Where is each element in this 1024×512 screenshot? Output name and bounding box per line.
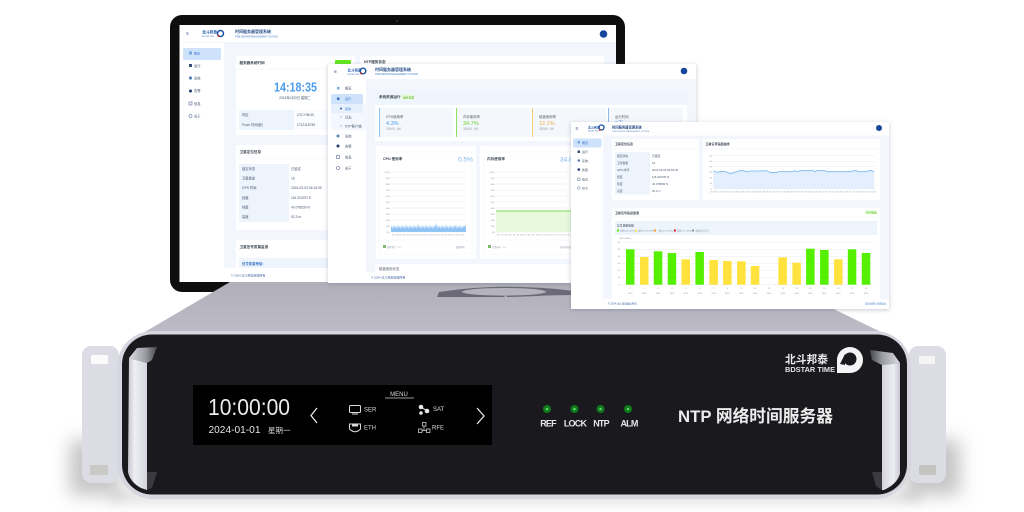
window three footer: 前往官网 — [865, 302, 876, 306]
satellite info panel: 卫星数量 — [617, 161, 628, 165]
CPU chart card: 100% — [384, 172, 390, 174]
server time card: Posix 时间(秒) — [242, 122, 263, 127]
screen one sidebar: 运行 — [194, 63, 201, 68]
quality legend: 优秀(≥40 dBHz) — [620, 228, 636, 232]
stat: uptime: 当前状态 · 良好 — [615, 126, 631, 130]
CPU chart card: 80% — [386, 184, 390, 186]
LCD display — [193, 385, 492, 445]
signal quality panel: 50 — [618, 249, 621, 251]
window three footer: 立即登录 — [876, 302, 887, 306]
window two header — [328, 64, 696, 79]
bar axis labels: 16 — [837, 288, 840, 290]
window two sidebar: 概览 — [345, 86, 352, 90]
right handle — [870, 350, 900, 490]
window three contents — [571, 122, 889, 309]
server chassis — [70, 282, 960, 503]
icon: network RFE: RFE — [432, 426, 444, 432]
screen one sidebar: 告警 — [194, 88, 201, 93]
satellite info card: 2024-03-03 06:18:35 — [291, 186, 322, 190]
bar axis labels: 4 — [671, 288, 673, 290]
memory chart card: 已用内存 : 1.0 — [492, 245, 506, 249]
window three sidebar: 系统 — [582, 158, 588, 163]
server time card: 1712118735 — [297, 123, 315, 127]
brand logo: 北斗邦泰 — [785, 352, 828, 366]
resource status card: 系统资源运行 — [379, 94, 401, 99]
bar axis labels: GPS — [725, 293, 730, 295]
window three sidebar: 告警 — [582, 167, 588, 172]
memory chart card: 10% — [491, 226, 495, 228]
bar axis labels: GPS — [711, 293, 717, 295]
chassis rim — [117, 331, 911, 499]
CPU chart card: 使用时间 — [456, 245, 465, 249]
window three header: BDSTAR TIME — [588, 130, 599, 132]
LED labels — [540, 418, 638, 428]
satellite info card: GPS 时间 — [242, 185, 256, 190]
signal quality panel — [612, 208, 880, 299]
memory chart card: 09:18:35 09:18:45 09:18:55 09:19:05 09:19:15 09:19:25 09:19:35 — [497, 234, 578, 236]
window two header: 北斗邦泰 — [348, 68, 362, 72]
satellite info card: 高度 — [242, 214, 249, 219]
bar axis labels: 5 — [685, 288, 687, 290]
memory area — [496, 211, 584, 232]
bar axis labels: 3 — [657, 288, 659, 290]
window two footer — [366, 272, 696, 283]
bar axis labels: GPS — [780, 293, 786, 295]
screen one header: TIME SERVER MANAGEMENT SYSTEM — [235, 36, 278, 38]
signal quality panel: 60 — [618, 242, 621, 244]
window two sidebar: 实时 — [345, 106, 351, 111]
memory chart card: 40% — [491, 208, 495, 210]
satellite info card: 116.324787 E — [291, 196, 312, 200]
window three sidebar: 运行 — [582, 149, 588, 154]
icon: ethernet ETH: ETH — [364, 426, 376, 432]
bar axis labels: GPS — [767, 293, 772, 295]
resource status card: 运行正常 — [403, 95, 414, 99]
signal curve — [713, 171, 874, 189]
screen one header — [180, 25, 616, 43]
window two header: ≡ — [334, 70, 337, 76]
icon: monitor SER — [350, 406, 377, 414]
screen one — [180, 25, 616, 282]
icon: monitor SER: SER — [364, 408, 377, 414]
screen three window — [571, 122, 889, 309]
screen two window — [328, 64, 696, 283]
satellite info card: 锁定状态 — [242, 166, 256, 171]
bar axis labels: GPS — [656, 293, 661, 295]
brand logo — [785, 347, 863, 374]
server time card: 时区 — [242, 112, 249, 117]
memory chart card: 30% — [491, 214, 495, 216]
date readout: 星期一 — [268, 426, 291, 435]
bar axis labels: 14 — [809, 288, 812, 290]
stat: cpu — [379, 108, 453, 137]
CPU chart card: 20% — [386, 220, 390, 222]
window three header: 北斗邦泰 — [588, 124, 600, 130]
signal quality card: 信号质量等级: — [242, 261, 263, 266]
bar axis labels: GPS — [850, 293, 855, 295]
satellite info panel: 经度 — [617, 175, 623, 179]
bar axis labels: GPS — [670, 293, 675, 295]
satellite info card: 已锁定 — [291, 166, 302, 171]
CPU chart card: 90% — [386, 178, 390, 180]
LED labels: ALM — [620, 418, 638, 428]
bar axis labels — [628, 288, 869, 295]
satellite info card: 16 — [291, 176, 295, 180]
bar axis labels: GPS — [864, 293, 869, 295]
window two contents — [328, 64, 696, 283]
window three header: 时间服务器管理系统 — [612, 124, 642, 130]
bar axis labels: GPS — [683, 293, 689, 295]
CPU chart card: 实时用户 : 1.0 — [387, 245, 401, 249]
screen one header: 北斗邦泰 — [202, 30, 217, 34]
icon: ethernet ETH — [350, 424, 376, 432]
product title: NTP 网络时间服务器 — [678, 406, 833, 426]
left rack ear — [82, 346, 119, 483]
window three footer: © 2024 北斗邦泰版权所有 — [608, 302, 637, 306]
stat: cpu: 4.3% — [386, 121, 399, 127]
signal curve panel: 40 — [710, 166, 713, 168]
memory chart card: 90% — [491, 178, 495, 180]
window two sidebar: 运行 — [345, 96, 351, 101]
screen one header: 时间服务器管理系统 — [235, 28, 271, 34]
window three footer — [603, 299, 889, 309]
satellite bars — [626, 249, 870, 285]
bar axis labels: 17 — [851, 288, 854, 290]
bar axis labels: GPS — [753, 293, 758, 295]
right rack ear — [909, 346, 946, 483]
signal quality panel: SNR (dBHz) — [619, 238, 631, 240]
screen one sidebar: 概览 — [194, 50, 200, 56]
satellite info panel: GPS 时间 — [617, 168, 629, 172]
bar axis labels: GPS — [642, 293, 647, 295]
window two sidebar: 信息 — [345, 154, 352, 160]
satellite info card: 卫星定位信息 — [240, 149, 261, 154]
bar axis labels: 9 — [741, 288, 743, 290]
satellite info card: 52.3 m — [291, 215, 301, 219]
satellite info panel — [612, 139, 699, 200]
memory chart card: 20% — [491, 220, 495, 222]
signal curve panel: 09:19:01 09:19:02 09:19:03 09:19:04 09:19:05 09:19:06 09:19:07 09:19:08 09:19:09 09:19:10 09:19:11 09:19:12 09:19:13 09:19:14 09:19:15 09:19:16 — [710, 192, 877, 194]
signal quality card — [236, 240, 604, 270]
window two header: TIME SERVER MANAGEMENT SYSTEM — [375, 73, 418, 76]
server time card — [236, 56, 355, 135]
satellite info panel: 高度 — [617, 189, 623, 193]
date readout — [208, 424, 291, 436]
server time card: 2024年4月3日 星期二 — [279, 95, 312, 100]
stat: uptime — [608, 108, 683, 137]
CPU spikes — [391, 222, 466, 232]
CPU chart card: 70% — [386, 190, 390, 192]
signal curve panel: 卫星信号强度曲线 — [706, 141, 730, 146]
screen one header: ≡ — [186, 31, 189, 37]
satellite info card: 40.078530 N — [291, 206, 311, 210]
bar axis labels: 13 — [795, 288, 799, 290]
signal quality panel: 10 — [618, 277, 621, 279]
server time card: UTC+08:00 — [297, 113, 314, 117]
memory chart card: 70% — [491, 190, 495, 192]
satellite info card: 经度 — [242, 195, 249, 200]
stat: disk: 12.1% — [539, 121, 555, 127]
CPU chart card — [376, 146, 476, 259]
lid emblem — [437, 287, 572, 297]
memory chart card: 0% — [492, 232, 495, 234]
bar axis labels: 11 — [768, 288, 771, 290]
signal curve panel: 50 — [710, 161, 713, 163]
CPU chart card: 50% — [386, 202, 390, 204]
chassis lid — [143, 282, 883, 333]
CPU chart card: 0% — [387, 232, 390, 234]
signal curve panel: 10 — [710, 183, 713, 185]
memory chart card: 80% — [491, 184, 495, 186]
window two sidebar: 告警 — [345, 144, 352, 148]
signal curve panel: 60 — [710, 156, 713, 158]
memory chart card: 100% — [489, 172, 495, 174]
floor shadow — [70, 440, 960, 503]
satellite info panel: 纬度 — [617, 182, 623, 186]
memory chart card: 内存使用率 — [487, 156, 505, 161]
status LEDs — [543, 405, 632, 413]
bar axis labels: GPS — [794, 293, 800, 295]
CPU chart card: 40% — [386, 208, 390, 210]
LED labels: LOCK — [564, 418, 587, 428]
satellite info panel: 卫星定位信息 — [615, 141, 633, 146]
CPU chart card: CPU 使用率 — [383, 156, 403, 161]
arrow right — [477, 408, 484, 424]
window three header — [571, 122, 889, 136]
satellite info panel: 2024-03-03 06:18:35 — [652, 168, 678, 172]
bar axis labels: 1 — [630, 288, 632, 290]
menu label — [385, 392, 414, 398]
satellite info panel: 16 — [652, 161, 656, 165]
bar axis labels: GPS — [697, 293, 703, 295]
screen one sidebar — [180, 43, 224, 282]
stat: uptime: 3天 — [615, 120, 624, 127]
CPU chart card: 30% — [386, 214, 390, 216]
screen one footer: © 2024 北斗邦泰版权所有 — [231, 272, 266, 278]
bar axis labels: 2 — [644, 288, 646, 290]
LED labels: NTP — [593, 418, 610, 428]
signal quality panel: 卫星信号质量监测 — [615, 210, 639, 215]
quality legend: 信号质量等级: — [617, 224, 635, 228]
icon: satellite SAT: SAT — [433, 407, 445, 413]
CPU chart card: 0.5% — [458, 156, 473, 164]
window two sidebar — [328, 79, 366, 283]
memory chart card: 总内存容量 — [560, 245, 572, 249]
arrow left — [311, 408, 317, 423]
bar axis labels: 6 — [699, 288, 701, 290]
window two sidebar: 关于 — [345, 166, 352, 170]
satellite info panel: 52.3 m — [652, 189, 661, 193]
stat: disk — [532, 108, 606, 137]
quality legend: 一般(20-29 dBHz) — [657, 228, 675, 232]
LED labels: REF — [540, 418, 557, 428]
satellite info card — [236, 145, 604, 230]
right status card — [360, 56, 604, 135]
stat: cpu: 当前状态 · 良好 — [386, 126, 402, 130]
quality legend: 良好(30-39 dBHz) — [638, 228, 656, 232]
tablet bezel — [170, 15, 625, 292]
quality legend: 较差(<20 dBHz) — [677, 228, 693, 232]
stat: memory: 当前状态 · 良好 — [463, 126, 479, 130]
screen one footer — [224, 268, 616, 282]
screen one sidebar: 关于 — [194, 114, 201, 118]
resource status card — [375, 90, 687, 141]
bar axis labels: 12 — [781, 288, 785, 290]
bar axis labels: GPS — [808, 293, 813, 295]
bar axis labels: 7 — [713, 288, 715, 290]
window three sidebar: 概览 — [582, 140, 588, 145]
stat: memory — [456, 108, 530, 137]
memory chart card — [480, 146, 590, 259]
disk status card: 磁盘使用状态 — [379, 266, 400, 271]
satellite info card: 卫星数量 — [242, 176, 256, 180]
window three sidebar: 信息 — [582, 176, 588, 182]
memory chart card: 50% — [491, 202, 495, 204]
stat: memory: 34.7% — [463, 121, 479, 127]
window three header: TIME SERVER MANAGEMENT SYSTEM — [612, 130, 649, 133]
signal quality panel: 40 — [618, 256, 621, 258]
satellite info panel: 116.324787 E — [652, 175, 669, 179]
stat: disk: 磁盘使用率 — [539, 114, 557, 119]
bar axis labels: GPS — [822, 293, 827, 295]
front panel — [122, 334, 907, 494]
memory chart card: 34.8% — [560, 156, 579, 164]
clock readout: 10:00:00 — [208, 394, 290, 420]
stat: uptime: 运行时间 — [615, 114, 629, 119]
disk status card — [375, 264, 687, 272]
signal curve panel: 0 — [711, 189, 713, 191]
bar axis labels: 8 — [727, 288, 729, 290]
stat: memory: 内存使用率 — [463, 114, 481, 119]
brand logo: BDSTAR TIME — [785, 367, 835, 374]
right status card: NTP服务状态 — [364, 59, 386, 64]
screen one sidebar: 系统 — [194, 76, 201, 80]
signal quality panel: 16 已锁定 — [866, 210, 877, 214]
left handle — [128, 347, 157, 490]
window three sidebar: 关于 — [582, 186, 588, 190]
signal quality panel: 0 — [619, 284, 621, 286]
window two sidebar: NTP客户端 — [345, 124, 362, 128]
satellite info card: 纬度 — [242, 204, 249, 210]
screen one sidebar: 信息 — [194, 101, 201, 106]
signal quality card: 卫星信号质量监测 — [240, 244, 269, 249]
window three header: ≡ — [576, 126, 578, 132]
screen one header: BDSTAR TIME — [202, 35, 215, 38]
stat: disk: 当前状态 · 良好 — [539, 126, 555, 130]
quality legend — [615, 221, 877, 235]
window three sidebar — [571, 136, 603, 309]
bar axis labels: 15 — [823, 288, 826, 290]
quality legend: 未锁定/无信号 — [695, 228, 710, 232]
window two sidebar: 日志 — [345, 114, 352, 120]
memory chart card: 60% — [491, 196, 495, 198]
signal curve panel: 30 — [710, 172, 713, 174]
satellite info panel: 锁定状态 — [617, 154, 628, 158]
CPU chart card: 10% — [386, 226, 390, 228]
server time card: 服务器系统时间 — [240, 60, 265, 65]
bar axis labels: GPS — [739, 293, 744, 295]
stat: cpu: CPU使用率 — [386, 114, 404, 119]
bar axis labels: GPS — [628, 293, 633, 295]
bar axis labels: 10 — [754, 288, 757, 290]
satellite info panel: 已锁定 — [652, 154, 661, 158]
menu label: MENU — [390, 392, 408, 398]
window two header: BDSTAR TIME — [348, 73, 360, 76]
clock: 14:18:35 — [274, 80, 317, 94]
icon: network RFE — [418, 422, 444, 432]
signal curve panel — [703, 139, 880, 200]
window two header: 时间服务器管理系统 — [375, 66, 411, 72]
CPU chart card: 60% — [386, 196, 390, 198]
date readout: 2024-01-01 — [208, 424, 261, 436]
CPU chart card: 09:18:35 09:18:45 09:18:55 09:19:05 09:19:15 09:19:25 09:19:35 — [392, 234, 465, 236]
signal curve panel: 20 — [710, 178, 713, 180]
bar axis labels: GPS — [836, 293, 841, 295]
camera — [396, 20, 398, 22]
satellite info panel: 40.078530 N — [652, 182, 668, 186]
signal quality panel: 20 — [618, 270, 621, 272]
tablet — [170, 15, 625, 292]
window two footer: © 2024 北斗邦泰版权所有 — [371, 274, 406, 280]
icon: satellite SAT — [419, 405, 445, 415]
signal quality panel: 30 — [618, 263, 621, 265]
bar axis labels: 18 — [865, 288, 868, 290]
window two sidebar: 系统 — [345, 134, 352, 138]
